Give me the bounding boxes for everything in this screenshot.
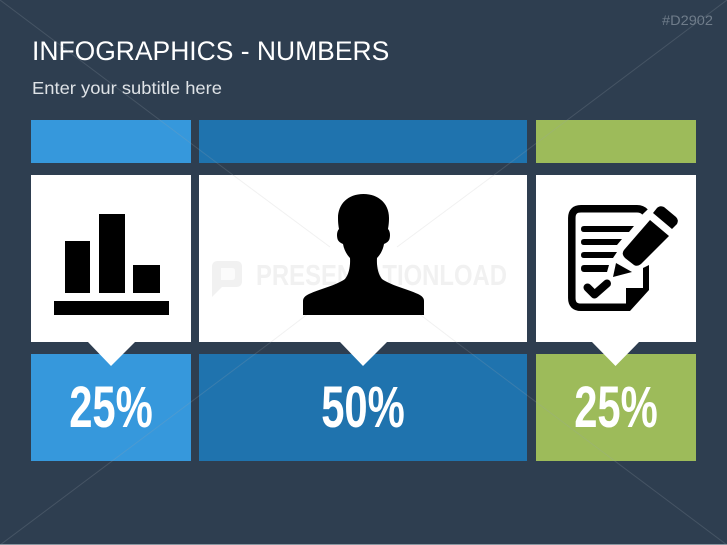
document outline [572,209,649,311]
icon: document with pencil and check [568,205,678,311]
title: INFOGRAPHICS - NUMBERS [32,36,389,66]
icon: bar chart [54,214,169,315]
bottom edge line [0,544,727,545]
right callout card [536,175,696,366]
pencil [613,206,678,277]
panel: middle header bar [199,120,527,163]
middle callout card [199,175,527,366]
value: 25% left: 25% [69,375,153,440]
check mark [588,284,607,294]
panel: right value box [536,354,696,461]
value: 25% right: 25% [574,375,658,440]
subtitle: Enter your subtitle here [32,78,222,98]
code label: #D2902 [662,12,713,28]
background diagonals on white card [233,175,494,342]
icon: person silhouette [303,194,424,315]
panel: left value box [31,354,191,461]
text lines [581,226,634,272]
panel: right header bar [536,120,696,163]
left callout card [31,175,191,366]
panel: left header bar [31,120,191,163]
panel: middle value box [199,354,527,461]
value: 50% middle: 50% [321,375,405,440]
